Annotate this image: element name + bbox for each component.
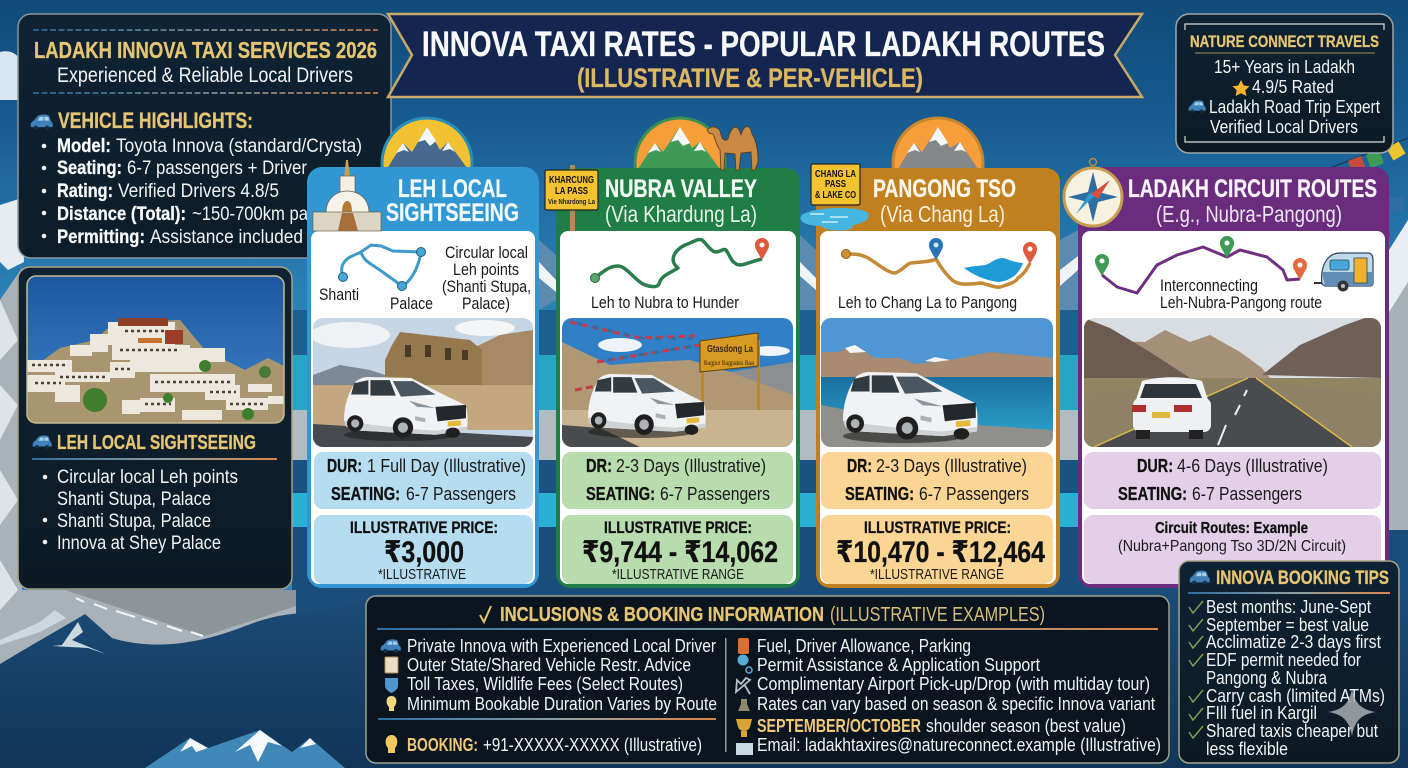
- panel heading: LADAKH INNOVA TAXI SERVICES 2026: [34, 37, 377, 63]
- panel: Nature Connect Travels: Verified Local Drivers: [1210, 117, 1358, 137]
- list: Shanti Stupa, Palace: [57, 511, 211, 532]
- duration and seating: SEATING:: [331, 484, 400, 504]
- route map: [590, 238, 769, 312]
- duration and seating: 2-3 Days (Illustrative): [616, 456, 766, 476]
- photo: Thiksey monastery: [27, 276, 284, 423]
- photo: Innova at Khardung La: [562, 318, 793, 447]
- icon: mountain badge Leh: [382, 118, 472, 208]
- route map: Interconnecting: [1160, 276, 1258, 295]
- card title: PANGONG TSO: [873, 175, 1016, 203]
- left inclusions list: Outer State/Shared Vehicle Restr. Advice: [407, 655, 691, 675]
- check marks: [1189, 601, 1203, 738]
- tips list: EDF permit needed for: [1206, 650, 1361, 670]
- icon: mountain badge Pangong: [893, 118, 983, 208]
- icon: mountain badge Nubra: [635, 118, 725, 208]
- right inclusions list: Fuel, Driver Allowance, Parking: [757, 636, 971, 656]
- duration and seating: SEATING:: [1118, 484, 1187, 504]
- vehicle highlights list: Permitting:: [57, 227, 145, 248]
- right inclusions list: Permit Assistance & Application Support: [757, 655, 1040, 675]
- list: Innova at Shey Palace: [57, 533, 221, 554]
- price: [821, 515, 1053, 584]
- panel: Innova booking tips: [1179, 561, 1399, 763]
- vehicle highlights list: Seating:: [57, 158, 122, 179]
- left inclusions list: Toll Taxes, Wildlife Fees (Select Routes): [407, 674, 683, 694]
- card: Pangong Tso: [816, 168, 1060, 588]
- title banner: [388, 14, 1142, 97]
- price: *ILLUSTRATIVE RANGE: [870, 566, 1004, 583]
- card: Leh local sightseeing: [307, 167, 539, 588]
- right inclusions list: [736, 636, 1161, 755]
- booking phone: +91-XXXXX-XXXXX (Illustrative): [483, 735, 702, 755]
- card: Nubra Valley: (Via Khardung La): [605, 201, 757, 227]
- vehicle highlights list: Model:: [57, 136, 111, 157]
- vehicle highlights list: Verified Drivers 4.8/5: [118, 181, 279, 202]
- duration and seating: [562, 452, 793, 509]
- photo: Innova at Leh palace: [310, 318, 533, 447]
- duration and seating: 1 Full Day (Illustrative): [367, 456, 526, 476]
- route map: Palace: [390, 294, 433, 313]
- right inclusions list: Email: ladakhtaxires@natureconnect.example (Illustrative): [757, 735, 1161, 755]
- duration and seating: SEATING:: [586, 484, 655, 504]
- icon: car: [1189, 100, 1206, 113]
- booking phone: BOOKING:: [407, 735, 478, 755]
- icon: caravan: [1314, 253, 1373, 292]
- price: ILLUSTRATIVE PRICE:: [350, 518, 498, 537]
- route map: [838, 238, 1037, 312]
- panel: Nature Connect Travels: Ladakh Road Trip Expert: [1209, 97, 1380, 117]
- vehicle highlights list: Distance (Total):: [57, 204, 186, 225]
- duration and seating: DR:: [847, 456, 872, 476]
- price: *ILLUSTRATIVE: [378, 566, 466, 583]
- tips list: September = best value: [1206, 615, 1369, 635]
- vehicle highlights list: [42, 136, 362, 248]
- icon: Chang La pass sign and lake: CHANG LA: [815, 169, 856, 180]
- tips list: Pangong & Nubra: [1206, 668, 1328, 688]
- panel: Ladakh Innova taxi services: [18, 14, 391, 258]
- right inclusions list: shoulder season (best value): [926, 716, 1126, 736]
- icon: Chang La pass sign and lake: [801, 164, 869, 230]
- card title: NUBRA VALLEY: [605, 175, 757, 203]
- duration and seating: 6-7 Passengers: [1192, 484, 1302, 504]
- icon: car: [33, 435, 52, 449]
- prayer flags top right: [1330, 138, 1408, 211]
- tips list: Shared taxis cheaper but: [1206, 721, 1378, 741]
- tips list: Best months: June-Sept: [1206, 597, 1371, 617]
- icon: Shanti Stupa: [313, 160, 381, 231]
- price: ILLUSTRATIVE PRICE:: [864, 518, 1011, 537]
- route map: Circular local: [445, 243, 528, 262]
- panel: Nature Connect Travels: 15+ Years in Ladakh: [1214, 57, 1355, 77]
- icon: Chang La pass sign and lake: & LAKE CO: [815, 190, 856, 201]
- route map: Leh to Chang La to Pangong: [838, 293, 1017, 312]
- card: Ladakh circuit routes: (E.g., Nubra-Pangong): [1156, 201, 1342, 227]
- tips list: Carry cash (limited ATMs): [1206, 686, 1385, 706]
- panel: Nature Connect Travels: [1176, 14, 1393, 153]
- panel subheading: Experienced & Reliable Local Drivers: [57, 64, 353, 87]
- duration and seating: [314, 452, 533, 509]
- panel: left Leh local sightseeing: [18, 267, 292, 589]
- duration and seating: 6-7 Passengers: [919, 484, 1029, 504]
- tips list: FIll fuel in Kargil: [1206, 703, 1317, 723]
- photo: Innova on Pangong road: [1084, 318, 1381, 447]
- photo: Innova at Pangong lake: [821, 318, 1053, 447]
- right inclusions list: SEPTEMBER/OCTOBER: [757, 716, 921, 736]
- right inclusions list: Rates can vary based on season & specific Innova variant: [757, 694, 1155, 714]
- left inclusions list: Private Innova with Experienced Local Driver: [407, 636, 716, 656]
- route map: Leh-Nubra-Pangong route: [1160, 293, 1322, 312]
- panel: inclusions and booking information: [366, 596, 1169, 763]
- circuit example: Circuit Routes: Example: [1155, 520, 1308, 537]
- duration and seating: 6-7 Passengers: [660, 484, 770, 504]
- price: ₹3,000: [384, 536, 464, 569]
- card: Ladakh circuit routes: [1078, 167, 1389, 588]
- icon: star: [1232, 80, 1250, 96]
- route map: [1095, 236, 1373, 312]
- card title: LEH LOCAL: [398, 175, 507, 203]
- title: INNOVA TAXI RATES - POPULAR LADAKH ROUTES: [422, 25, 1105, 64]
- vehicle highlights list: Assistance included: [150, 227, 303, 248]
- tips list: less flexible: [1206, 739, 1288, 759]
- price: [314, 515, 533, 584]
- icon: Khardung La pass sign: [545, 165, 598, 231]
- duration and seating: 4-6 Days (Illustrative): [1177, 456, 1328, 476]
- route map: [319, 243, 531, 313]
- subtitle: (ILLUSTRATIVE & PER-VEHICLE): [577, 63, 923, 93]
- icon: car: [31, 114, 53, 130]
- left inclusions list: Minimum Bookable Duration Varies by Route: [407, 694, 717, 714]
- circuit example: [1084, 515, 1381, 584]
- list: [43, 467, 238, 554]
- route map: Leh points: [453, 260, 519, 279]
- tips list: Acclimatize 2-3 days first: [1206, 632, 1381, 652]
- card: Leh local sightseeing: SIGHTSEEING: [386, 199, 519, 227]
- list: Shanti Stupa, Palace: [57, 489, 211, 510]
- left inclusions list: [381, 636, 717, 714]
- tips list: [1206, 597, 1385, 759]
- vehicle highlights list: Rating:: [57, 181, 113, 202]
- duration and seating: [1084, 452, 1381, 509]
- right inclusions list: Complimentary Airport Pick-up/Drop (with multiday tour): [757, 674, 1150, 694]
- photo: Innova at Khardung La: Gtasdong La: [707, 344, 753, 355]
- price: ₹10,470 - ₹12,464: [836, 536, 1045, 569]
- panel: Nature Connect Travels: 4.9/5 Rated: [1252, 77, 1334, 97]
- price: *ILLUSTRATIVE RANGE: [612, 566, 744, 583]
- duration and seating: DUR:: [1137, 456, 1173, 476]
- duration and seating: 6-7 Passengers: [406, 484, 516, 504]
- icon: camel: [707, 127, 758, 170]
- icon: Khardung La pass sign: Vie Nhardong La: [548, 199, 595, 206]
- duration and seating: DUR:: [327, 456, 362, 476]
- heading: [480, 604, 1045, 626]
- card: Pangong Tso: (Via Chang La): [880, 201, 1005, 227]
- duration and seating: SEATING:: [845, 484, 914, 504]
- card: Nubra Valley: [556, 168, 800, 588]
- route map: Palace): [462, 294, 510, 313]
- duration and seating: 2-3 Days (Illustrative): [876, 456, 1027, 476]
- price: ₹9,744 - ₹14,062: [582, 536, 778, 569]
- circuit example: (Nubra+Pangong Tso 3D/2N Circuit): [1118, 538, 1346, 555]
- route map: Shanti: [319, 285, 359, 304]
- photo: Innova at Khardung La: Bagpur Bagpates Baa: [704, 361, 755, 367]
- booking phone: [386, 735, 702, 755]
- icon: Khardung La pass sign: LA PASS: [555, 186, 588, 197]
- price: ILLUSTRATIVE PRICE:: [604, 518, 752, 537]
- icon: sparkle: [1328, 689, 1376, 736]
- vehicle highlights heading: VEHICLE HIGHLIGHTS:: [58, 108, 253, 133]
- route map: (Shanti Stupa,: [442, 277, 531, 296]
- duration and seating: [821, 452, 1053, 509]
- icon: car: [1190, 570, 1210, 585]
- heading: INCLUSIONS & BOOKING INFORMATION: [500, 604, 824, 626]
- icon: Chang La pass sign and lake: PASS: [825, 179, 846, 190]
- heading: (ILLUSTRATIVE EXAMPLES): [830, 604, 1045, 626]
- price: [562, 515, 793, 584]
- vehicle highlights list: ~150-700km pa: [192, 204, 308, 225]
- list: Circular local Leh points: [57, 467, 238, 488]
- duration and seating: DR:: [586, 456, 612, 476]
- heading: LEH LOCAL SIGHTSEEING: [57, 432, 256, 454]
- icon: compass: [1064, 158, 1122, 226]
- vehicle highlights list: Toyota Innova (standard/Crysta): [116, 136, 362, 157]
- route map: Leh to Nubra to Hunder: [591, 293, 739, 312]
- icon: Khardung La pass sign: KHARCUNG: [549, 175, 594, 186]
- vehicle highlights list: 6-7 passengers + Driver: [127, 158, 308, 179]
